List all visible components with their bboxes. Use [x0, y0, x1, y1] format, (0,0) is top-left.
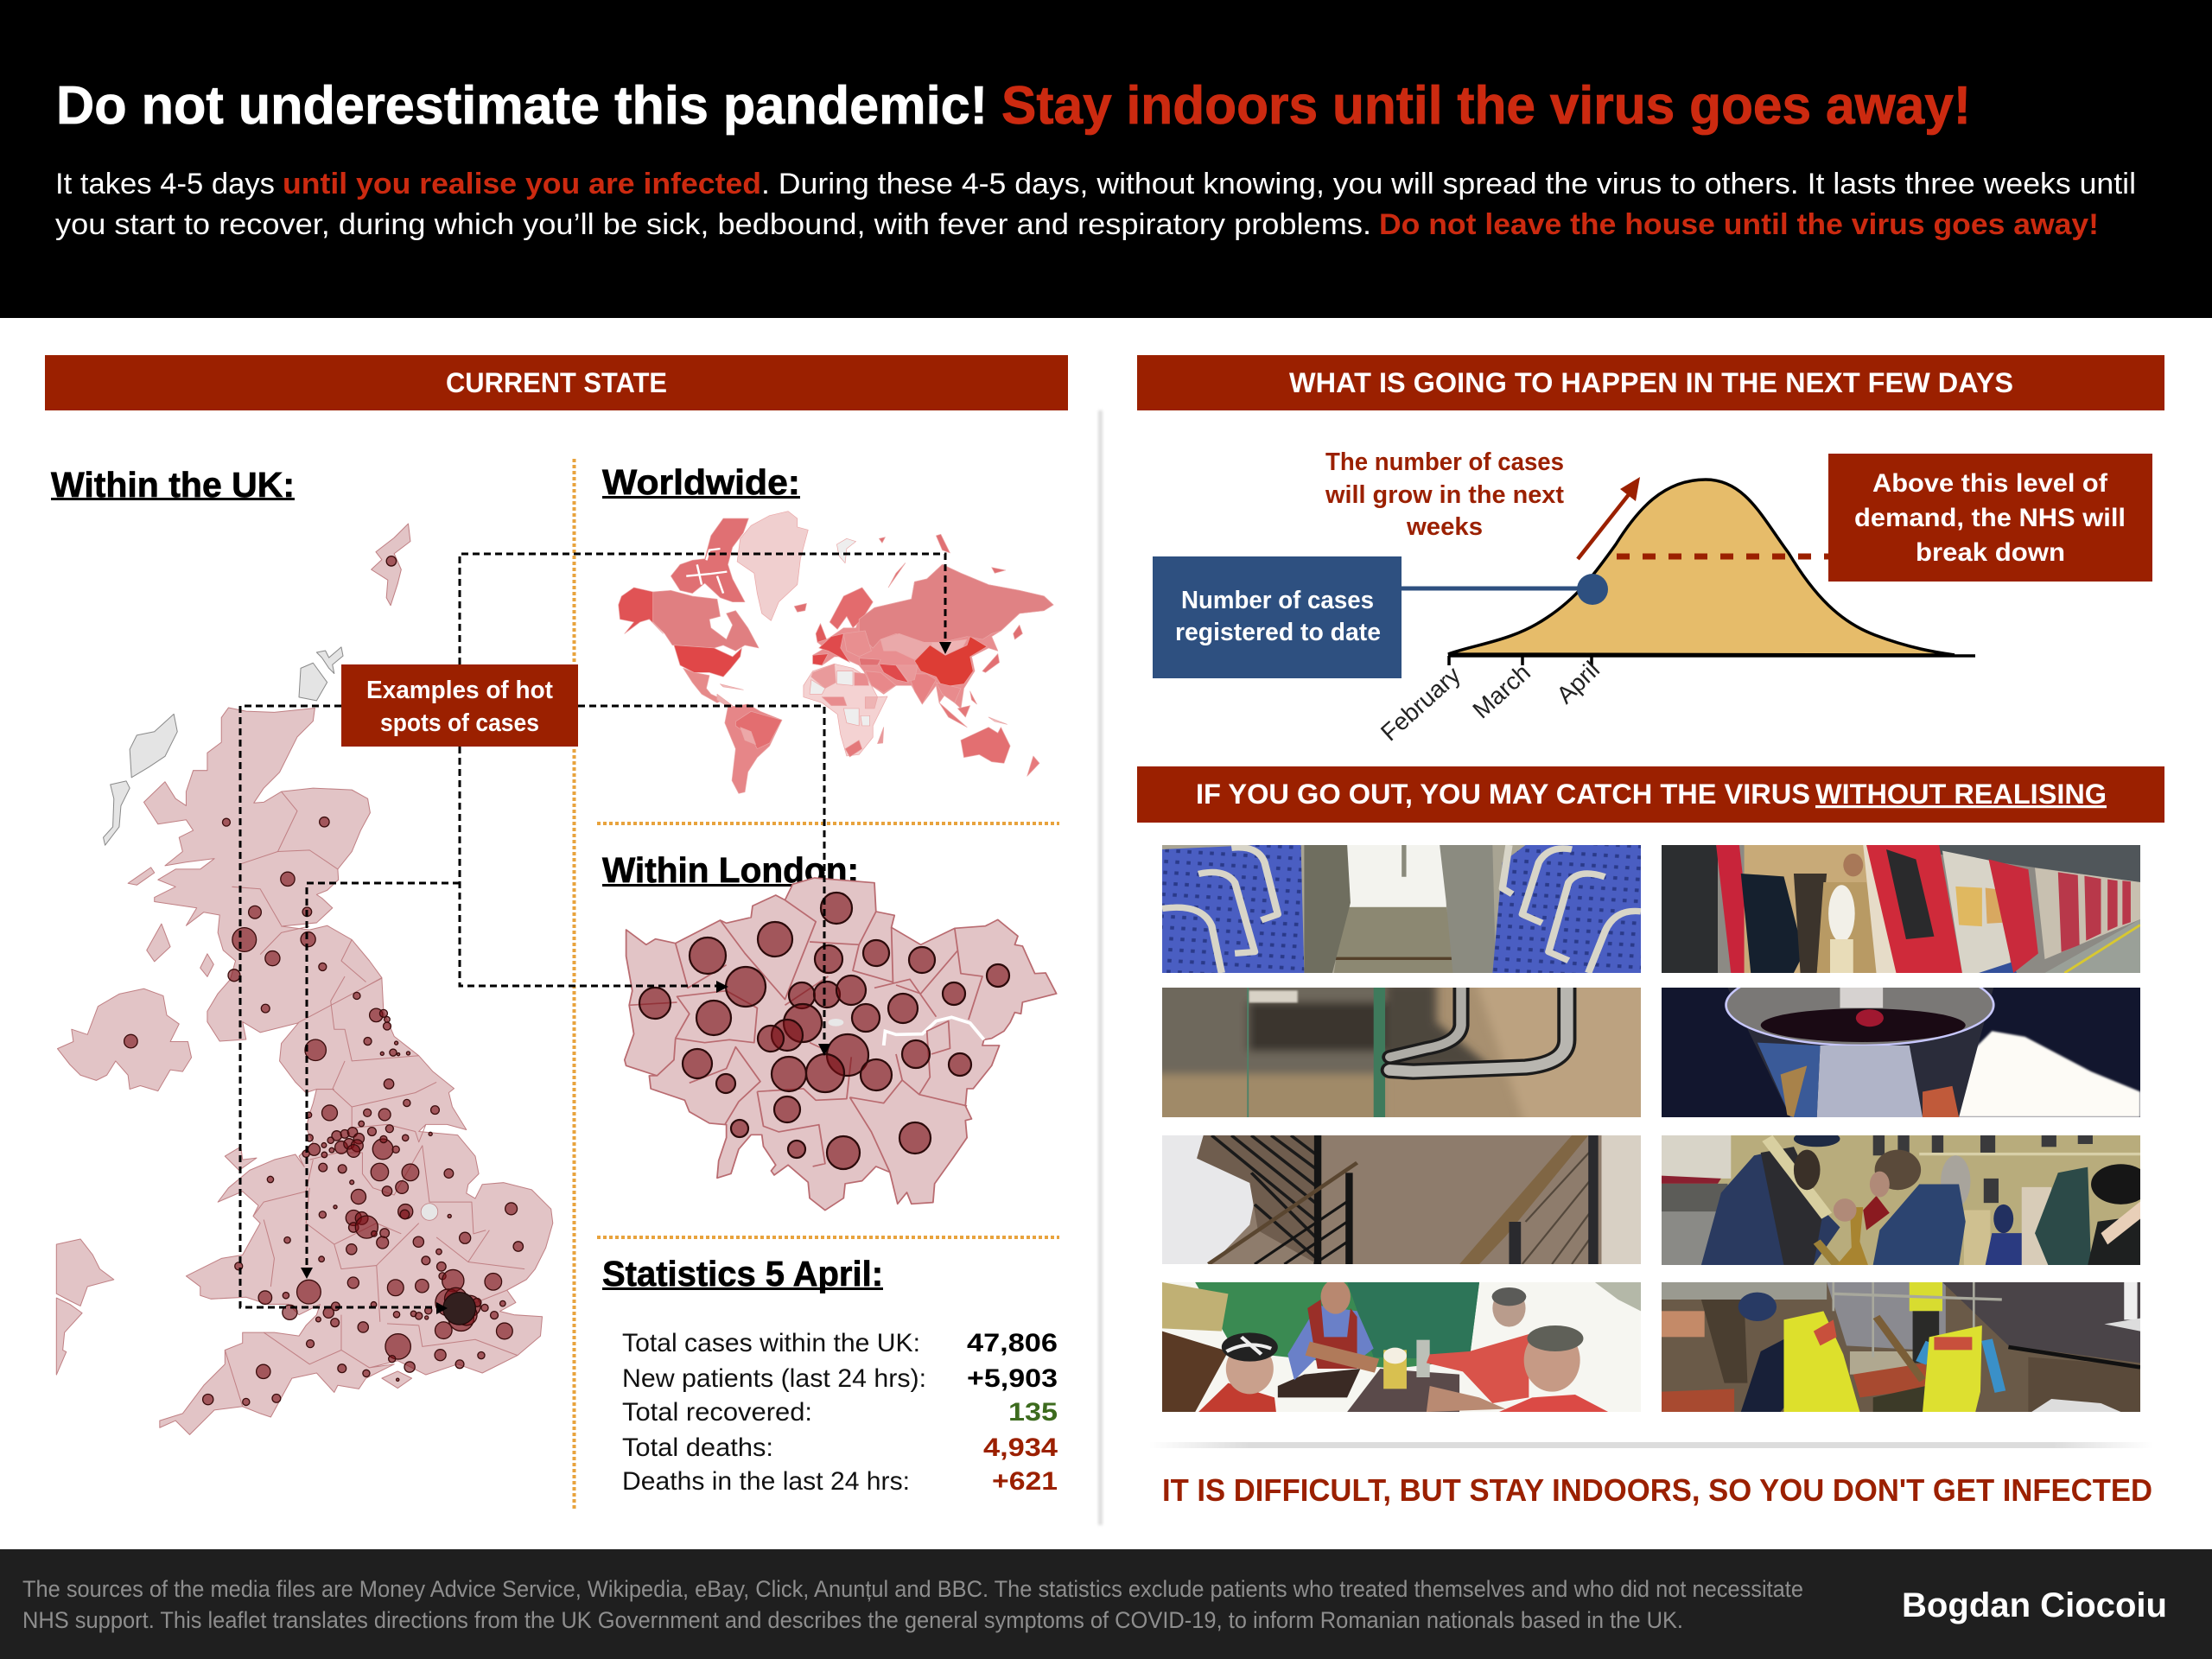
callout: NHS limit: demand, the NHS will	[1854, 504, 2126, 532]
panel divider	[1098, 410, 1103, 1525]
statistics table: 4,934	[983, 1433, 1058, 1462]
footer	[0, 1549, 2212, 1659]
annotation: number of cases will grow: will grow in the next	[1325, 481, 1564, 509]
case circles: England, Wales, NI	[124, 992, 523, 1406]
statistics table: 47,806	[967, 1329, 1058, 1357]
London outline	[625, 878, 1057, 1211]
photo: priest giving communion	[1662, 1135, 2140, 1265]
growth arrow	[1578, 477, 1640, 559]
photo: metal handle	[1162, 988, 1641, 1117]
callout: hot spots: spots of cases	[380, 709, 539, 737]
author: Bogdan Ciocoiu	[1902, 1586, 2167, 1624]
England, Wales, Northern Ireland	[56, 976, 553, 1434]
statistics table	[622, 1329, 1058, 1496]
callout: NHS limit: break down	[1916, 538, 2065, 567]
sources note: NHS support. This leaflet translates directions from the UK Government and describes the general symptoms of COVID-19, to inform Romanian nationals based in the UK.	[22, 1607, 1683, 1633]
statistics table: Total recovered:	[622, 1398, 812, 1427]
annotation: number of cases will grow	[1325, 448, 1564, 541]
statistics table: New patients (last 24 hrs):	[622, 1364, 926, 1393]
month labels: February	[1376, 661, 1465, 746]
sources note: The sources of the media files are Money Advice Service, Wikipedia, eBay, Click, Anunțul and BBC. The statistics exclude patients who treated themselves and who did not necessitate	[22, 1576, 1803, 1602]
heading bar: if you go out: IF YOU GO OUT, YOU MAY CATCH THE VIRUS	[1196, 779, 1810, 810]
borough case circles	[639, 893, 1009, 1169]
callout: NHS limit: Above this level of	[1872, 469, 2108, 498]
month labels	[1376, 656, 1605, 746]
London cluster	[443, 1293, 475, 1325]
photo: builders on a roof	[1662, 1282, 2140, 1412]
heading bar: next few days	[1137, 355, 2164, 410]
photo: stair rail	[1162, 1135, 1641, 1264]
heading bar: next few days: WHAT IS GOING TO HAPPEN IN THE NEXT FEW DAYS	[1289, 367, 2013, 398]
map: London boroughs	[625, 878, 1057, 1211]
intro paragraph: It takes 4-5 days	[55, 168, 275, 200]
current position marker	[1402, 574, 1608, 605]
annotation: number of cases will grow: weeks	[1406, 513, 1483, 541]
statistics table: Total cases within the UK:	[622, 1329, 920, 1357]
callout: hot spots	[341, 664, 578, 747]
statistics table: Deaths in the last 24 hrs:	[622, 1467, 910, 1496]
callout: cases to date	[1153, 556, 1402, 678]
heading bar: current state: CURRENT STATE	[446, 367, 667, 398]
intro paragraph: Do not leave the house until the virus goes away!	[1379, 208, 2099, 241]
callout: cases to date: registered to date	[1175, 619, 1381, 646]
divider: London / statistics	[597, 1236, 1059, 1239]
photo: underground train	[1662, 845, 2140, 973]
case circles: Scotland	[222, 556, 397, 982]
intro paragraph: . During these 4-5 days, without knowing, you will spread the virus to others. It lasts three weeks until	[761, 168, 2136, 200]
callout: cases to date: Number of cases	[1181, 587, 1374, 614]
statistics table: +5,903	[967, 1364, 1058, 1393]
vertical divider: UK / right column	[572, 459, 575, 1510]
heading: statistics: Statistics 5 April:	[602, 1254, 883, 1294]
chart: epidemic curve	[1376, 477, 1975, 746]
annotation: number of cases will grow: The number of cases	[1325, 448, 1564, 476]
title: Stay indoors until the virus goes away!	[1001, 76, 1971, 136]
intro paragraph	[55, 168, 2136, 241]
axis	[1448, 656, 1975, 665]
heading bar: current state	[45, 355, 1068, 410]
arrowheads	[301, 642, 951, 1314]
heading: worldwide: Worldwide:	[602, 462, 800, 502]
month labels: March	[1467, 658, 1535, 724]
capacity line	[1617, 553, 1828, 560]
divider below photos	[1149, 1442, 2153, 1448]
statistics table: Total deaths:	[622, 1433, 773, 1462]
Scotland and islands	[104, 524, 410, 1041]
statistics table: +621	[992, 1467, 1058, 1496]
hot spot connectors	[240, 554, 951, 1314]
callout: hot spots: Examples of hot	[366, 677, 553, 704]
map: UK cases	[56, 524, 553, 1434]
photo: train seats	[1162, 845, 1641, 973]
statistics table: 135	[1008, 1398, 1058, 1427]
heading: within London: Within London:	[602, 850, 859, 890]
heading bar: if you go out: WITHOUT REALISING	[1815, 779, 2107, 810]
map: world cases	[619, 512, 1053, 793]
photo: communion chalice	[1662, 988, 2140, 1117]
sources note	[22, 1576, 1803, 1633]
curve area	[1448, 480, 1955, 655]
intro paragraph: you start to recover, during which you’ll be sick, bedbound, with fever and respiratory problems.	[55, 208, 1371, 241]
intro paragraph: until you realise you are infected	[283, 168, 761, 200]
title	[56, 76, 1971, 136]
callout: NHS limit	[1828, 454, 2152, 582]
month labels: April	[1551, 656, 1605, 709]
heading bar: if you go out	[1137, 766, 2164, 823]
header band	[0, 0, 2212, 318]
photo: men at a pub table	[1162, 1282, 1641, 1412]
title: Do not underestimate this pandemic!	[56, 76, 988, 136]
closing message: IT IS DIFFICULT, BUT STAY INDOORS, SO YOU DON'T GET INFECTED	[1162, 1472, 2152, 1508]
heading: within the UK: Within the UK:	[51, 465, 295, 505]
divider: worldwide / London	[597, 822, 1059, 825]
